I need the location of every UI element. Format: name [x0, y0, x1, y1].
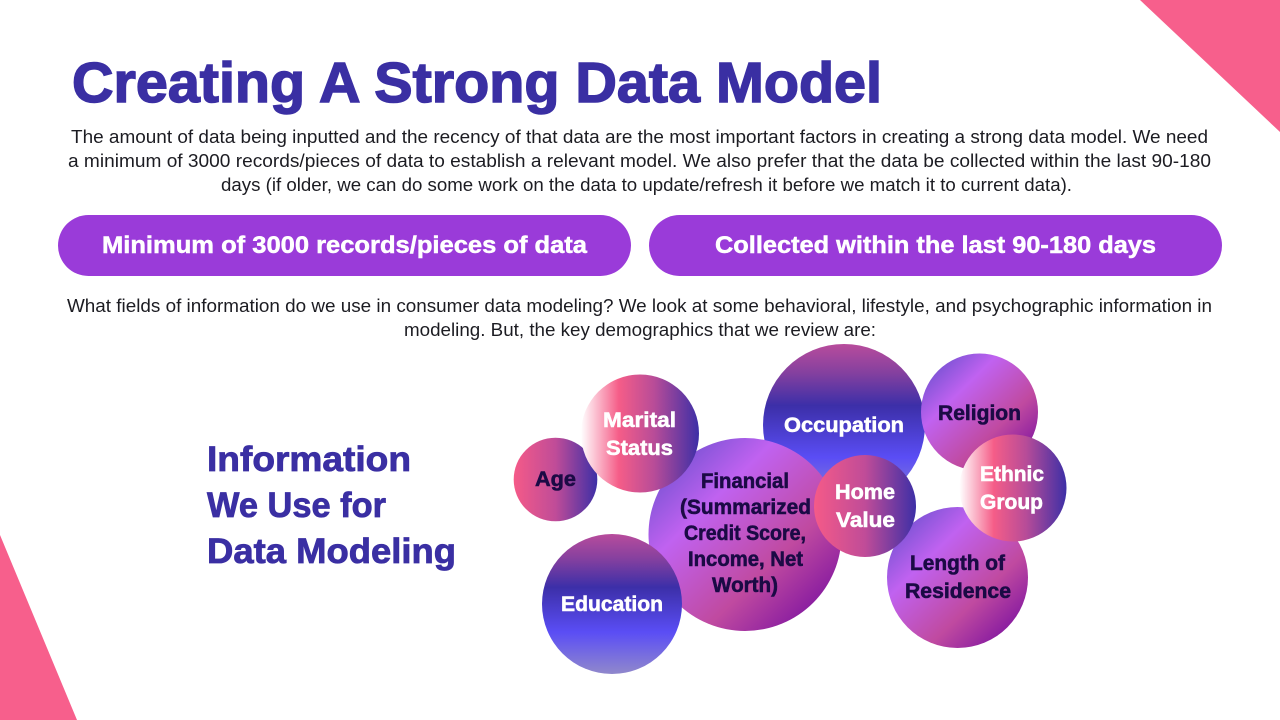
- intro paragraph: a minimum of 3000 records/pieces of data to establish a relevant model. We also prefer that the data be collected within the last 90-180: [68, 150, 1211, 171]
- fields paragraph: [67, 295, 1212, 340]
- bubble: education: [542, 534, 682, 674]
- bubble: home value: Home: [835, 481, 895, 504]
- bubble: home value: Value: [836, 509, 895, 532]
- pill: minimum records: [58, 215, 631, 276]
- fields paragraph: What fields of information do we use in consumer data modeling? We look at some behavioral, lifestyle, and psychographic information in: [67, 295, 1212, 316]
- side heading: [207, 440, 456, 571]
- intro paragraph: [68, 126, 1211, 195]
- bubble: ethnic group: Group: [980, 491, 1043, 514]
- bubble cluster: [514, 344, 1066, 674]
- side heading: We Use for: [207, 486, 386, 525]
- bubble: length of residence: Length of: [910, 552, 1006, 575]
- bubble: financial: Income, Net: [688, 548, 803, 571]
- bubble: education: Education: [561, 593, 663, 616]
- side heading: Information: [207, 440, 411, 479]
- bubble: religion: Religion: [938, 402, 1021, 425]
- corner triangle: top right: [1140, 0, 1280, 132]
- intro paragraph: The amount of data being inputted and the recency of that data are the most important factors in creating a strong data model. We need: [71, 126, 1208, 147]
- bubble: religion: [921, 354, 1038, 470]
- bubble: marital status: Marital: [603, 409, 676, 432]
- bubble: financial: Financial: [701, 470, 789, 493]
- bubble: length of residence: [887, 507, 1028, 648]
- bubble: financial: [648, 438, 842, 631]
- fields paragraph: modeling. But, the key demographics that we review are:: [404, 319, 876, 340]
- bubble: marital status: Status: [606, 437, 673, 460]
- pill: minimum records: Minimum of 3000 records/pieces of data: [102, 232, 588, 259]
- intro paragraph: days (if older, we can do some work on the data to update/refresh it before we match it to current data).: [221, 174, 1072, 195]
- bubble: occupation: [763, 344, 925, 506]
- bubble: financial: Worth): [712, 574, 778, 597]
- pill: collection window: [649, 215, 1222, 276]
- bubble: length of residence: Residence: [905, 580, 1011, 603]
- side heading: Data Modeling: [207, 532, 456, 571]
- bubble: ethnic group: Ethnic: [980, 463, 1044, 486]
- bubble: home value: [814, 455, 916, 557]
- bubble: financial: Credit Score,: [684, 522, 806, 545]
- bubble: age: Age: [535, 468, 576, 491]
- bubble: ethnic group: [960, 434, 1066, 542]
- bubble: age: [514, 438, 597, 521]
- bubble: marital status: [581, 374, 699, 492]
- pill: collection window: Collected within the last 90-180 days: [715, 232, 1156, 259]
- bubble: financial: (Summarized: [680, 496, 811, 519]
- corner triangle: bottom left: [0, 535, 77, 720]
- title: Creating A Strong Data Model: [72, 51, 882, 115]
- bubble: occupation: Occupation: [784, 414, 904, 437]
